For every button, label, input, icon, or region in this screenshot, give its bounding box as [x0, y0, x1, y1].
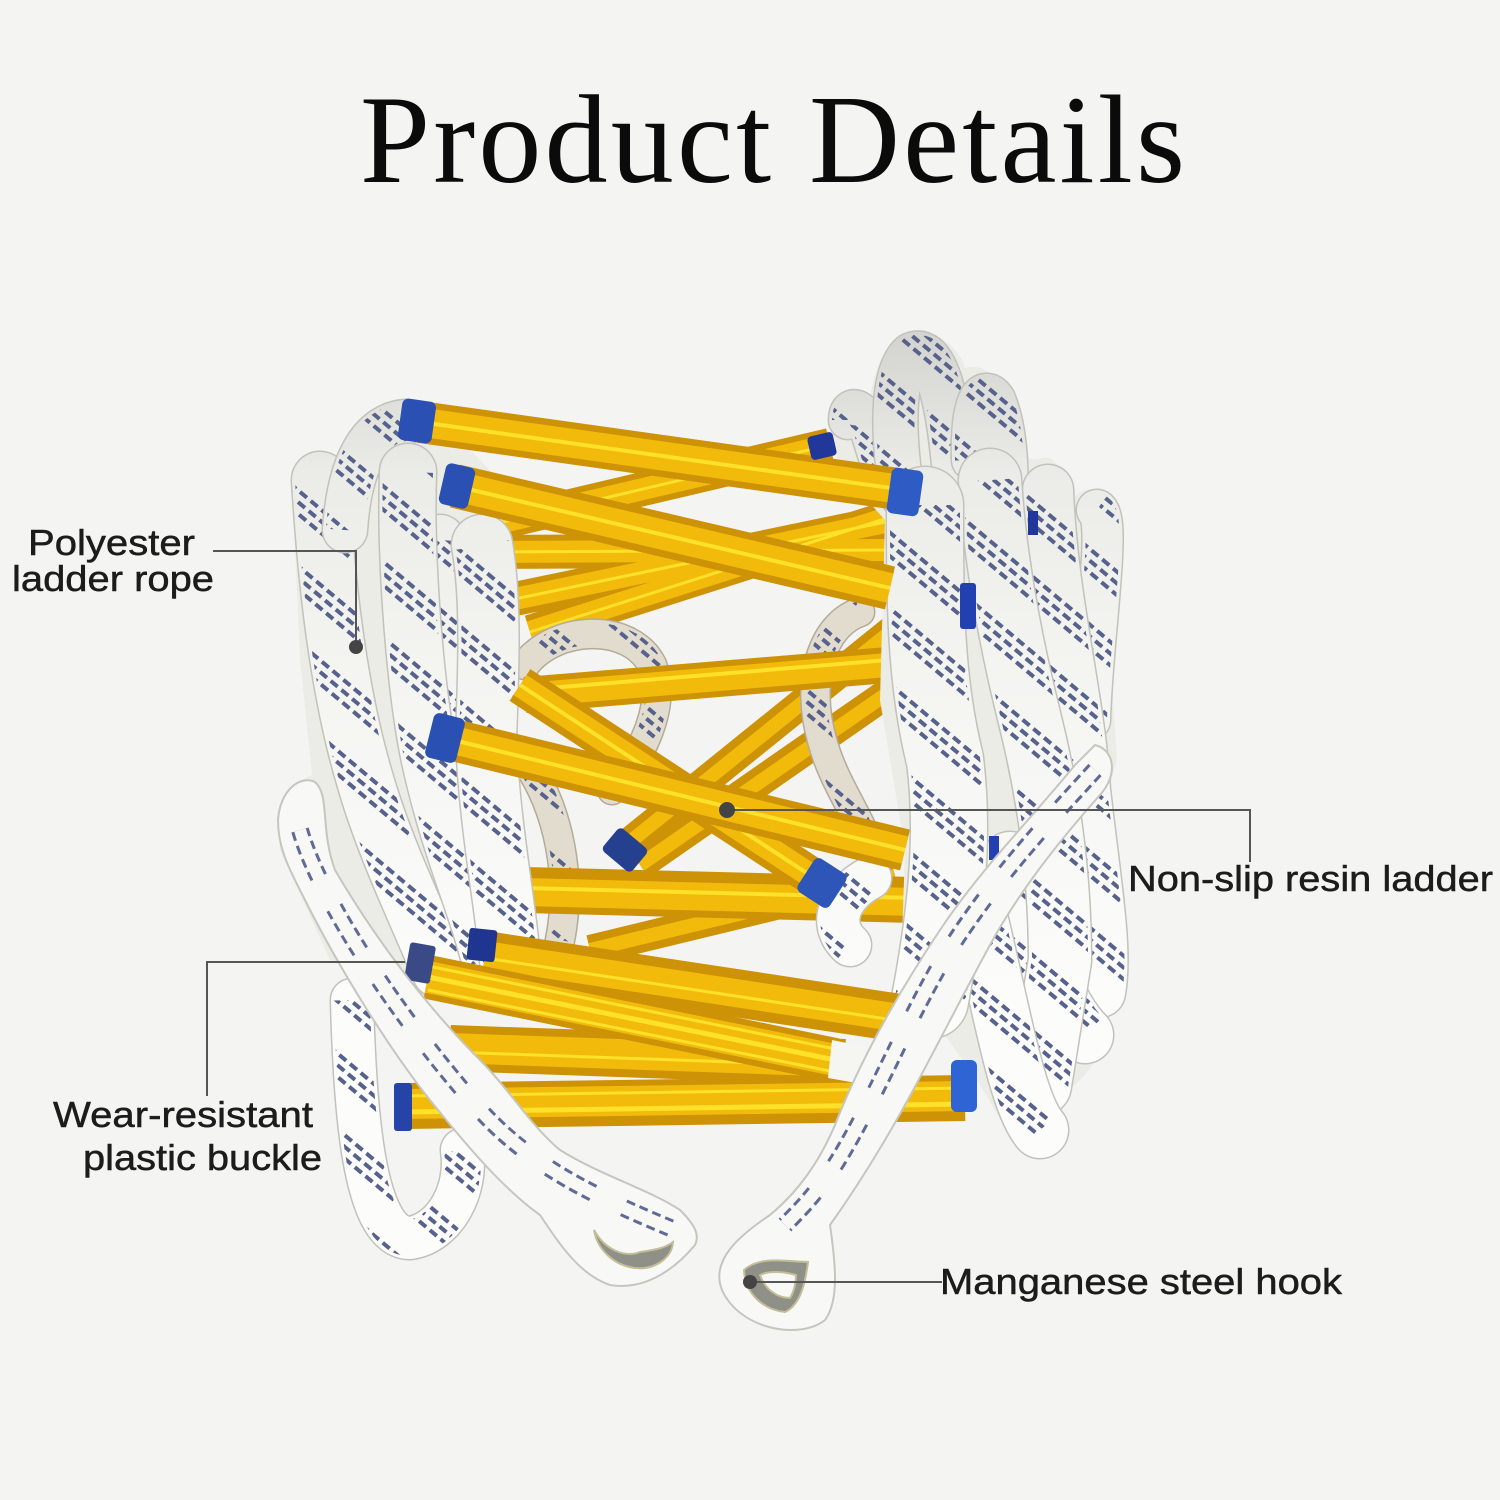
callout: manganese steel hook: Manganese steel hook: [940, 1261, 1343, 1302]
small white rope lobe by centre: [838, 878, 870, 945]
right rope bundle: [828, 329, 1127, 1153]
front rope with right hook eye: [719, 745, 1112, 1330]
lower left rope loop: [352, 1000, 463, 1238]
left rope bundle: [279, 403, 540, 1000]
callout: manganese steel hook: [743, 1261, 1343, 1302]
steel thimble right: [744, 1260, 808, 1312]
steel thimble left: [594, 1230, 673, 1268]
callout: non-slip resin ladder: [719, 802, 1493, 899]
callout: wear-resistant plastic buckle: Wear-resistant: [53, 1094, 313, 1135]
callout: non-slip resin ladder: Non-slip resin ladder: [1128, 858, 1493, 899]
back rungs: [490, 445, 900, 950]
callout: wear-resistant plastic buckle: [53, 962, 405, 1178]
blue buckles: [394, 398, 1038, 1131]
callout: polyester ladder rope: Polyester: [28, 522, 195, 563]
front rope with left hook eye: [278, 780, 697, 1286]
callout: wear-resistant plastic buckle: plastic buckle: [83, 1137, 322, 1178]
front rungs: [405, 422, 965, 1112]
back rope loops: [525, 612, 872, 940]
title: Product Details: [360, 71, 1185, 210]
callout: polyester ladder rope: [12, 522, 363, 654]
middle rungs: [525, 659, 915, 902]
ladder illustration: [278, 329, 1127, 1330]
callout: polyester ladder rope: ladder rope: [12, 558, 214, 599]
